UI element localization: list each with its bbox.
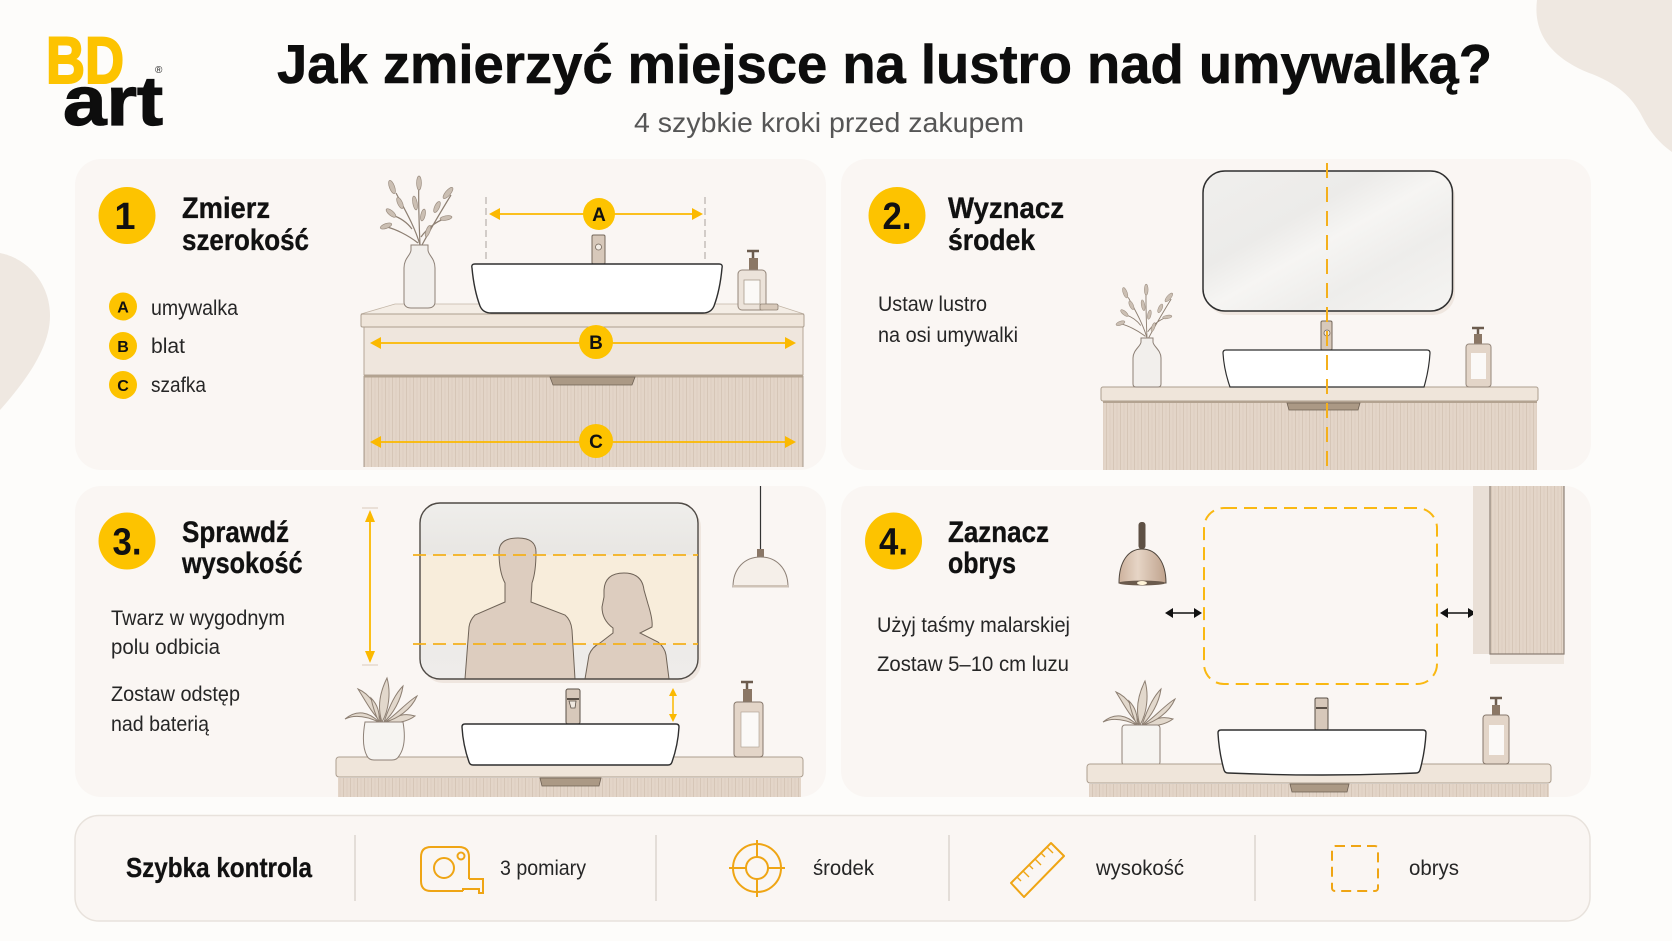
text step 4	[877, 614, 1070, 676]
decorative blob left	[0, 253, 50, 410]
heading step 4: obrys	[948, 547, 1016, 580]
dimension C	[370, 424, 796, 458]
mirror with reflection	[413, 503, 701, 683]
label obrys: obrys	[1409, 857, 1459, 880]
dimension B	[370, 325, 796, 359]
icon: dashed outline	[1332, 846, 1378, 891]
legend A B C: A	[117, 300, 129, 316]
mirror	[1203, 171, 1455, 315]
faucet	[1321, 321, 1332, 350]
woman silhouette	[585, 573, 669, 679]
badge 3: 3.	[112, 522, 142, 564]
badge 4	[865, 512, 922, 570]
panel: step 2 find centre	[841, 159, 1591, 470]
badge 3	[98, 512, 156, 570]
dimension A: A	[592, 205, 606, 226]
dimension A	[486, 197, 705, 263]
icon: tape measure	[421, 847, 483, 893]
centre axis line	[1326, 163, 1328, 470]
badge 2: 2.	[882, 196, 912, 238]
text step 2: na osi umywalki	[878, 324, 1018, 347]
faucet	[1315, 698, 1328, 730]
legend A B C: szafka	[151, 374, 206, 397]
legend A B C: umywalka	[151, 297, 238, 320]
text step 3	[111, 607, 285, 736]
text step 4: Użyj taśmy malarskiej	[877, 614, 1070, 637]
legend A B C: C	[117, 378, 129, 395]
heading quick check: Szybka kontrola	[126, 852, 312, 883]
vanity cabinet	[361, 304, 804, 467]
badge 4: 4.	[879, 522, 908, 564]
panel: step 4 mark outline	[841, 486, 1591, 797]
legend A B C: blat	[151, 335, 185, 358]
heading step 4: Zaznacz	[948, 516, 1049, 549]
panel: quick check bar	[75, 816, 1590, 921]
soap bottle	[1483, 698, 1509, 764]
icon: target	[729, 840, 785, 897]
gap arrow	[669, 688, 677, 722]
washbasin	[1218, 730, 1426, 775]
badge 1: 1	[114, 196, 136, 238]
text step 3: Zostaw odstęp	[111, 683, 240, 706]
heading step 1	[182, 192, 309, 257]
dashed mirror outline	[1204, 508, 1437, 684]
subtitle: 4 szybkie kroki przed zakupem	[634, 107, 1024, 138]
panel: step 1 measure width	[75, 159, 826, 470]
height arrow	[362, 508, 378, 665]
soap bottle and bar	[738, 251, 778, 310]
decorative blob top right	[1536, 0, 1672, 152]
plant in vase	[1115, 284, 1174, 387]
left gap arrow	[1165, 608, 1202, 618]
text step 3: nad baterią	[111, 713, 209, 736]
washbasin	[1223, 350, 1430, 387]
heading step 1: szerokość	[182, 224, 309, 257]
heading step 1: Zmierz	[182, 192, 270, 225]
legend A B C	[109, 292, 238, 399]
plant in vase	[380, 176, 454, 308]
washbasin	[462, 724, 679, 765]
text step 3: polu odbicia	[111, 636, 220, 659]
text step 2	[878, 293, 1018, 347]
label wysokosc: wysokość	[1095, 857, 1184, 880]
man silhouette	[465, 538, 575, 679]
soap bottle	[1466, 328, 1491, 387]
heading step 3: Sprawdź	[182, 516, 289, 549]
text step 3: Twarz w wygodnym	[111, 607, 285, 630]
pendant lamp	[733, 486, 788, 588]
title: Jak zmierzyć miejsce na lustro nad umywalką?	[277, 33, 1492, 95]
logo: art	[63, 62, 163, 140]
legend A B C: B	[117, 339, 129, 356]
dimension C: C	[589, 432, 603, 453]
plant in pot	[345, 678, 417, 760]
badge 1	[98, 187, 156, 244]
text step 4: Zostaw 5–10 cm luzu	[877, 653, 1069, 676]
heading step 3	[181, 516, 302, 580]
right gap arrow	[1440, 608, 1476, 618]
icon: ruler	[1011, 843, 1064, 897]
washbasin	[472, 264, 722, 313]
vanity cabinet	[1087, 764, 1551, 797]
heading step 2: Wyznacz	[948, 192, 1064, 225]
heading step 4	[948, 516, 1049, 580]
label srodek: środek	[813, 857, 874, 880]
vanity cabinet	[336, 757, 803, 797]
plant in pot	[1103, 681, 1175, 765]
dimension B: B	[589, 333, 603, 354]
text step 2: Ustaw lustro	[878, 293, 987, 316]
comfort zone band	[420, 555, 698, 644]
heading step 3: wysokość	[181, 547, 302, 580]
faucet	[592, 235, 605, 264]
faucet	[566, 689, 580, 724]
panel: step 3 check height	[75, 486, 826, 797]
heading step 2	[948, 192, 1064, 257]
wall cabinet	[1473, 486, 1564, 664]
vanity cabinet	[1101, 387, 1538, 470]
logo: BD	[46, 23, 124, 97]
logo: ®	[155, 65, 163, 76]
wall lamp	[1118, 522, 1166, 586]
logo	[46, 23, 163, 140]
badge 2	[868, 187, 926, 244]
heading step 2: środek	[948, 224, 1035, 257]
soap bottle	[734, 682, 763, 757]
label 3 pomiary: 3 pomiary	[500, 857, 586, 880]
